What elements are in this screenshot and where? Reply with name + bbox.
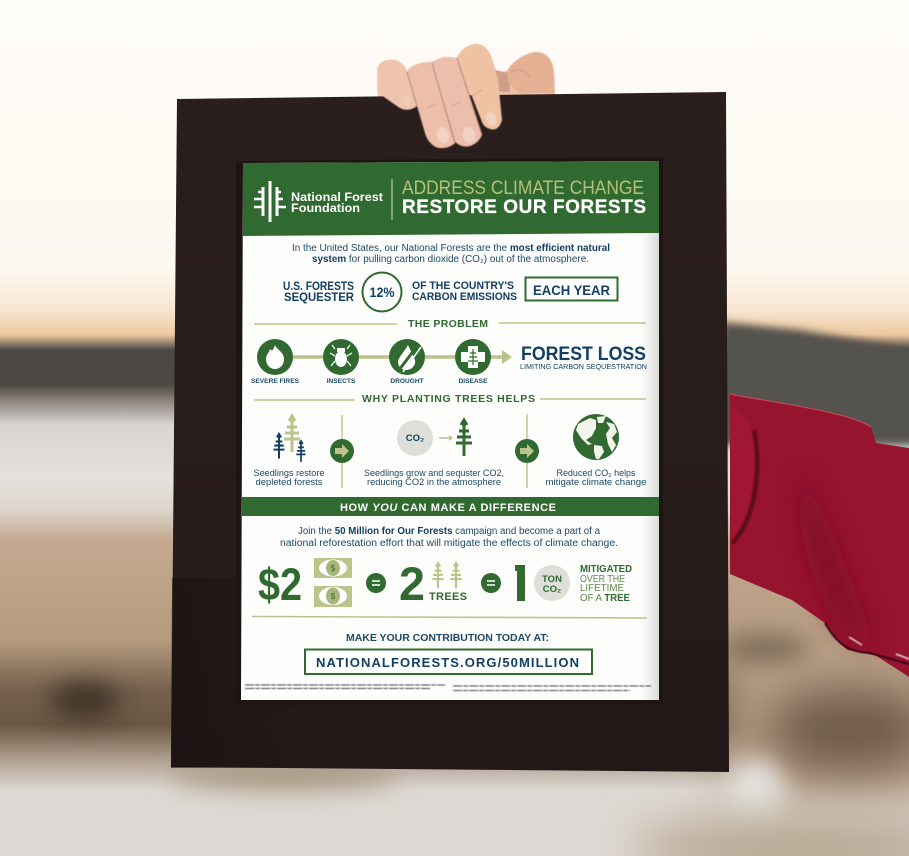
arrow badge two [515,439,539,463]
hand behind frame [377,44,555,99]
band: how you can make a difference: HOW YOU CAN MAKE A DIFFERENCE [340,502,556,514]
middle finger [432,57,482,147]
icon: two trees [432,563,462,588]
forest loss callout: LIMITING CARBON SEQUESTRATION [520,362,647,371]
statistic row: 12 percent: SEQUESTER [284,292,355,304]
mitigated text: OVER THE [580,573,625,585]
campaign paragraph: national reforestation effort that will mitigate the effects of climate change. [280,538,618,549]
mitigated text: MITIGATED [580,563,632,575]
mitigated text: OF A TREE [580,592,630,604]
arrow badge one [330,439,354,463]
mitigated text: LIFETIME [580,582,624,594]
campaign paragraph [280,526,618,549]
statistic row: 12 percent: U.S. FORESTS [283,281,354,293]
pinky finger [377,60,417,110]
band: how you can make a difference [242,497,659,516]
red sleeve [730,394,909,677]
equation row [258,557,632,610]
icon labels: DISEASE [459,378,488,385]
statistic row: 12 percent: OF THE COUNTRY'S [412,280,514,292]
finger creases and nails [407,58,482,143]
heading: restore our forests: RESTORE OUR FORESTS [402,197,646,218]
text: reduced CO2: mitigate climate change [546,476,646,487]
column dividers [342,414,527,488]
section heading: the problem: THE PROBLEM [408,318,488,330]
icon: severe fires [257,339,293,375]
divider [252,616,647,618]
logo tree icon [254,181,286,222]
ton CO2 badge: TON [542,574,562,585]
icon labels [251,378,488,385]
icon: disease [455,339,491,375]
ton CO2 badge: CO₂ [543,584,561,595]
icon labels: DROUGHT [390,378,424,385]
call to action: MAKE YOUR CONTRIBUTION TODAY AT: [346,632,549,644]
text: seedlings restore: depleted forests [256,476,323,487]
intro paragraph: system for pulling carbon dioxide (CO₂) out of the atmosphere. [312,254,589,265]
url box: NATIONALFORESTS.ORG/50MILLION [316,655,579,670]
logo wordmark [291,190,383,215]
text: seedlings restore [254,467,324,487]
text: reduced CO2 [546,467,646,487]
url box [305,650,592,674]
icon: insects [323,339,359,375]
poster sheet [241,161,659,700]
statistic row: 12 percent [283,272,618,312]
equals badge two [481,573,501,593]
text: seedlings grow [364,467,504,487]
header divider [391,179,393,220]
icon: dollar bills [314,558,352,607]
text: seedlings grow: reducing CO2 in the atmosphere [367,476,501,487]
statistic row: 12 percent: 12% [370,285,394,300]
campaign paragraph: Join the 50 Million for Our Forests campaign and become a part of a [298,526,600,537]
problem chain [251,339,512,385]
text: seedlings restore: Seedlings restore [254,467,324,478]
icon: globe [573,414,619,460]
trees label: TREES [429,591,467,603]
logo wordmark: National Forest [291,190,383,204]
fine print bars [245,685,651,690]
logo wordmark: Foundation [291,201,360,215]
icon labels: INSECTS [327,378,356,385]
text: reduced CO2: Reduced CO₂ helps [556,467,636,478]
connecting arrow [275,355,504,359]
index finger [457,44,502,130]
statistic row: 12 percent: CARBON EMISSIONS [412,291,517,303]
right edge shading [640,233,659,700]
one [515,565,525,601]
black picture frame [171,92,729,772]
intro paragraph [292,243,610,265]
two dollars: $2 [258,559,302,610]
icon: dollar bills: $ [331,592,336,601]
icon: CO2 cloud to tree [397,420,472,456]
icon: dollar bills: $ [331,564,336,573]
icon: CO2 cloud to tree: CO₂ [406,433,424,444]
paper background [241,161,659,700]
intro paragraph: In the United States, our National Forests are the most efficient natural [292,243,610,254]
equals badge one [366,573,386,593]
icon labels: SEVERE FIRES [251,378,300,385]
header band [243,161,659,236]
icon: drought [389,339,425,375]
icon: three seedling trees [274,416,306,462]
ring finger [407,63,455,148]
heading: address climate change: ADDRESS CLIMATE CHANGE [402,178,644,199]
forest loss callout: FOREST LOSS [521,344,646,365]
ton CO2 badge [534,565,570,601]
statistic row: 12 percent: EACH YEAR [533,282,610,298]
text: seedlings grow: Seedlings grow and sequster CO2, [364,467,504,478]
two: 2 [399,557,425,610]
section heading: why planting trees helps: WHY PLANTING TREES HELPS [362,393,535,405]
mitigated text [580,563,632,604]
hand fingers over frame [377,44,502,148]
